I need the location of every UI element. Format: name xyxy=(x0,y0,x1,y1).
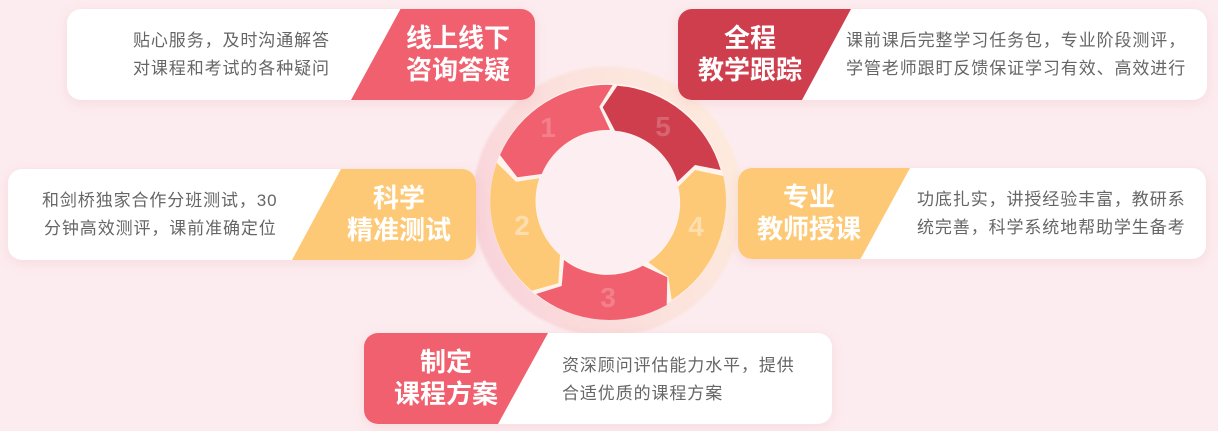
halo ring xyxy=(472,66,742,336)
segment 3: 3 xyxy=(600,282,616,313)
tag background xyxy=(364,333,548,424)
card: custom course plan xyxy=(364,333,832,424)
card title: 咨询答疑 xyxy=(406,55,510,85)
card title: 科学 xyxy=(373,183,425,213)
card: online and offline consultation xyxy=(67,9,535,100)
card description xyxy=(846,31,1186,78)
card title xyxy=(394,347,498,409)
card description xyxy=(42,191,278,238)
inner circle xyxy=(536,130,680,274)
tag background xyxy=(678,9,851,100)
segment 4 xyxy=(648,170,726,300)
card description: 对课程和考试的各种疑问 xyxy=(133,59,330,78)
segment 5: 5 xyxy=(655,111,671,142)
card description: 贴心服务，及时沟通解答 xyxy=(133,31,330,50)
card title: 线上线下 xyxy=(406,23,510,53)
card description: 和剑桥独家合作分班测试，30 xyxy=(42,191,278,210)
card title xyxy=(406,23,510,85)
card description: 分钟高效测评，课前准确定位 xyxy=(44,219,277,238)
card description xyxy=(133,31,330,78)
segment 3 xyxy=(536,260,667,320)
card title xyxy=(347,183,451,245)
card: scientific placement test xyxy=(8,169,476,260)
card description: 学管老师跟盯反馈保证学习有效、高效进行 xyxy=(846,59,1186,78)
segment 2 xyxy=(490,163,560,291)
process ring xyxy=(474,66,740,333)
segment 5 xyxy=(603,86,721,182)
tag background xyxy=(292,169,476,260)
card description xyxy=(917,190,1186,237)
card description: 统完善，科学系统地帮助学生备考 xyxy=(917,218,1186,237)
ring base xyxy=(490,84,726,320)
card title: 制定 xyxy=(420,347,472,377)
card description: 合适优质的课程方案 xyxy=(562,384,723,403)
tag background xyxy=(351,9,535,100)
card description: 课前课后完整学习任务包，专业阶段测评， xyxy=(846,31,1186,50)
tag background xyxy=(738,168,910,259)
card title xyxy=(698,23,802,85)
card title xyxy=(757,182,861,244)
card: professional teachers xyxy=(738,168,1206,259)
card title: 精准测试 xyxy=(347,215,451,245)
card description: 资深顾问评估能力水平，提供 xyxy=(562,356,795,375)
card title: 教师授课 xyxy=(757,214,861,244)
card title: 教学跟踪 xyxy=(698,55,802,85)
card title: 全程 xyxy=(724,23,776,53)
card title: 课程方案 xyxy=(394,379,498,409)
segment 1: 1 xyxy=(540,112,556,143)
card: full teaching follow-up xyxy=(678,9,1207,100)
card title: 专业 xyxy=(783,182,835,212)
segment 1 xyxy=(500,85,613,177)
card description: 功底扎实，讲授经验丰富，教研系 xyxy=(917,190,1186,209)
card description xyxy=(562,356,795,403)
segment 4: 4 xyxy=(688,211,704,242)
segment 2: 2 xyxy=(514,210,530,241)
